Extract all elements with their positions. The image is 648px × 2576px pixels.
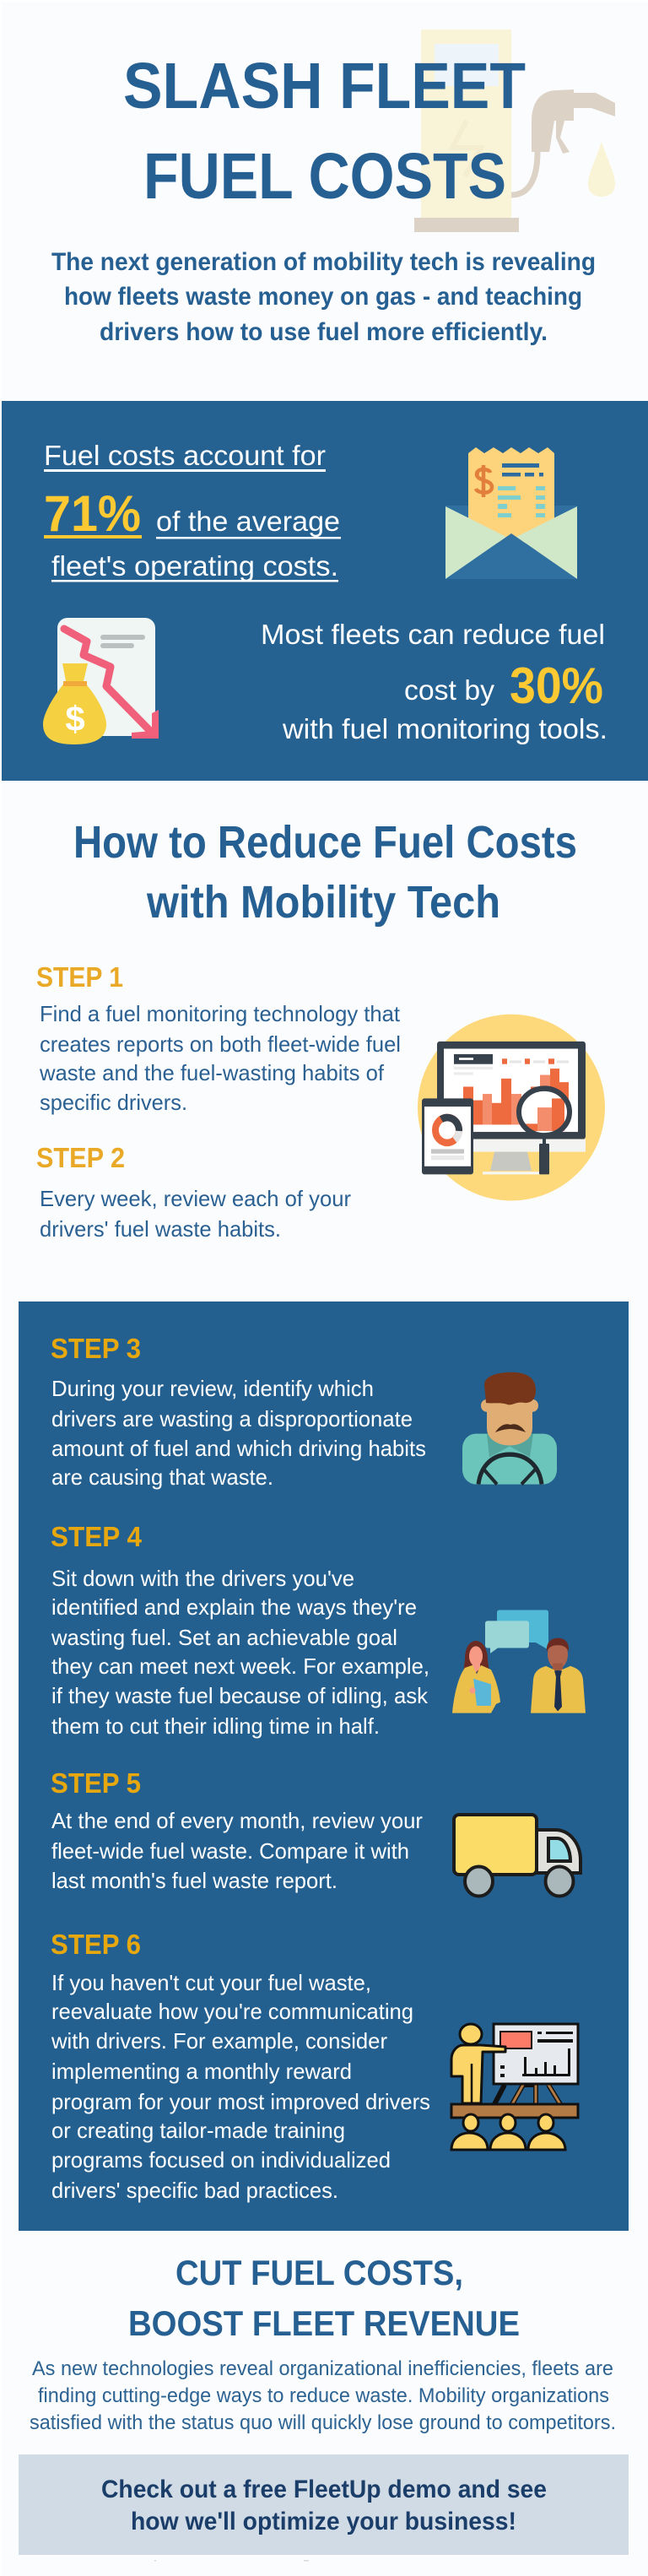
step 6: with drivers. For example, consider bbox=[51, 2028, 387, 2054]
icon: monitor, tablet and magnifier bbox=[418, 1015, 605, 1200]
stat: 71 percent: 71% bbox=[44, 485, 141, 542]
step 6: program for your most improved drivers bbox=[51, 2089, 430, 2114]
step 3: During your review, identify which bbox=[51, 1376, 374, 1401]
step 2: drivers' fuel waste habits. bbox=[40, 1216, 281, 1242]
step 1: specific drivers. bbox=[40, 1090, 187, 1115]
conclusion text: satisfied with the status quo will quickly lose ground to competitors. bbox=[30, 2411, 616, 2434]
step 3 bbox=[51, 1333, 426, 1490]
heading: how to reduce fuel costs bbox=[73, 817, 577, 928]
title: FUEL COSTS bbox=[143, 140, 506, 213]
step 6: If you haven't cut your fuel waste, bbox=[51, 1970, 371, 1995]
step 2: STEP 2 bbox=[36, 1142, 125, 1173]
step 1 bbox=[36, 961, 401, 1115]
step 4: if they waste fuel because of idling, ask bbox=[51, 1683, 429, 1708]
step 3: STEP 3 bbox=[51, 1333, 141, 1364]
step 4: Sit down with the drivers you've bbox=[51, 1566, 354, 1591]
icon: receipt in envelope bbox=[446, 447, 577, 579]
heading: cut fuel costs, boost fleet revenue: CUT FUEL COSTS, bbox=[176, 2253, 463, 2292]
step 5 bbox=[51, 1767, 423, 1893]
subtitle bbox=[51, 248, 596, 346]
conclusion text: finding cutting-edge ways to reduce waste. Mobility organizations bbox=[38, 2384, 609, 2407]
step 4: they can meet next week. For example, bbox=[51, 1653, 429, 1679]
step 4 bbox=[51, 1521, 429, 1739]
conclusion text bbox=[30, 2357, 616, 2434]
icon: money bag and falling arrow bbox=[43, 618, 159, 744]
conclusion text: As new technologies reveal organizational inefficiencies, fleets are bbox=[32, 2357, 613, 2380]
stat: 30 percent bbox=[261, 619, 608, 744]
step 2: Every week, review each of your bbox=[40, 1186, 351, 1211]
stat: 71 percent: fleet's operating costs. bbox=[51, 550, 338, 582]
icon: two people talking bbox=[452, 1610, 586, 1713]
panel: steps 3 to 6 bbox=[19, 1302, 629, 2231]
step 1: waste and the fuel-wasting habits of bbox=[39, 1060, 385, 1085]
step 4: wasting fuel. Set an achievable goal bbox=[51, 1625, 397, 1650]
step 5: At the end of every month, review your bbox=[51, 1808, 423, 1833]
title: SLASH FLEET bbox=[123, 50, 526, 122]
stat: 71 percent: Fuel costs account for bbox=[44, 440, 326, 471]
icon: presenter with audience bbox=[451, 2024, 578, 2150]
step 4: them to cut their idling time in half. bbox=[51, 1713, 380, 1739]
step 1: Find a fuel monitoring technology that bbox=[40, 1001, 401, 1026]
step 1: creates reports on both fleet-wide fuel bbox=[40, 1031, 401, 1057]
step 2 bbox=[36, 1142, 351, 1242]
heading: cut fuel costs, boost fleet revenue bbox=[128, 2253, 520, 2343]
stat: 30 percent: Most fleets can reduce fuel bbox=[261, 619, 605, 650]
panel: key statistics bbox=[2, 401, 648, 781]
icon: driver at steering wheel bbox=[462, 1372, 557, 1485]
step 4: identified and explain the ways they're bbox=[51, 1594, 417, 1620]
step 5: STEP 5 bbox=[51, 1767, 141, 1799]
step 6: programs focused on individualized bbox=[51, 2147, 391, 2173]
subtitle: The next generation of mobility tech is revealing bbox=[51, 248, 596, 276]
heading: how to reduce fuel costs: with Mobility Tech bbox=[146, 877, 500, 928]
step 3: drivers are wasting a disproportionate bbox=[51, 1406, 413, 1431]
stat: 30 percent: with fuel monitoring tools. bbox=[282, 713, 608, 744]
stat: 30 percent: 30% bbox=[510, 658, 603, 714]
subtitle: how fleets waste money on gas - and teaching bbox=[64, 283, 582, 311]
stat: 71 percent: of the average bbox=[156, 506, 340, 537]
step 6 bbox=[51, 1929, 430, 2203]
title bbox=[123, 50, 526, 213]
step 1: STEP 1 bbox=[36, 961, 123, 993]
heading: cut fuel costs, boost fleet revenue: BOOST FLEET REVENUE bbox=[128, 2303, 520, 2343]
step 4: STEP 4 bbox=[51, 1521, 143, 1552]
step 6: reevaluate how you're communicating bbox=[51, 1999, 413, 2024]
call to action box: Check out a free FleetUp demo and see bbox=[101, 2476, 547, 2503]
stat: 71 percent bbox=[44, 440, 341, 582]
call to action box bbox=[19, 2454, 629, 2555]
step 6: drivers' specific bad practices. bbox=[51, 2178, 338, 2203]
step 6: STEP 6 bbox=[51, 1929, 141, 1960]
step 5: last month's fuel waste report. bbox=[51, 1868, 338, 1893]
icon: fuel pump bbox=[414, 30, 615, 232]
icon: money bag and falling arrow: $ bbox=[65, 699, 85, 739]
step 6: implementing a monthly reward bbox=[51, 2059, 352, 2084]
icon: delivery truck bbox=[454, 1815, 580, 1896]
step 3: are causing that waste. bbox=[51, 1464, 273, 1490]
step 3: amount of fuel and which driving habits bbox=[51, 1436, 426, 1461]
heading: how to reduce fuel costs: How to Reduce Fuel Costs bbox=[73, 817, 577, 868]
subtitle: drivers how to use fuel more efficiently. bbox=[100, 318, 548, 346]
stat: 30 percent: cost by bbox=[404, 674, 495, 706]
step 6: or creating tailor-made training bbox=[51, 2118, 345, 2143]
step 5: fleet-wide fuel waste. Compare it with bbox=[51, 1838, 409, 1864]
call to action box: how we'll optimize your business! bbox=[131, 2508, 516, 2535]
